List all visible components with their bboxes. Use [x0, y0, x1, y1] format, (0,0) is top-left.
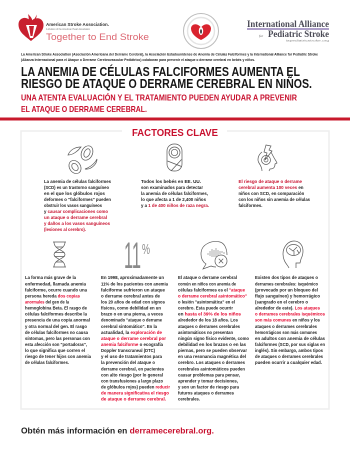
- title: [21, 64, 312, 91]
- text: silent stroke: común en niños con anemia de: [178, 281, 237, 286]
- text: silent stroke: cerebrales asintomáticos pueden: [178, 366, 245, 371]
- icon: head with lightning: [258, 145, 277, 171]
- text: sickle cell disease and trait: La forma más grave de la: [25, 275, 77, 280]
- text: silent stroke: El ataque o derrame cerebral: [178, 275, 237, 280]
- text: stroke types: de ataques o derrames cerebrales: [255, 354, 324, 359]
- text: anemia definition: (lesiones al cerebro).: [44, 227, 86, 232]
- text: silent stroke: asintomáticos no presentan: [178, 330, 233, 335]
- text: newborn screening: lo que afecta a 1 de 2,400 niños: [141, 197, 207, 202]
- logo: International Alliance for Pediatric Stroke: iapediatricstroke.org: [286, 38, 330, 42]
- logo: International Alliance for Pediatric Stroke: for: [259, 34, 264, 38]
- text: stroke types: alrededor de este). Los ataques: [255, 306, 321, 310]
- text: silent stroke: [178, 275, 249, 402]
- stat: 11%: %: [142, 241, 150, 258]
- text: 1998 statistic and treatment: anemia falciforme o ecografía: [101, 342, 164, 347]
- text: 1998 statistic and treatment: con alto riesgo (por lo general: [101, 372, 163, 377]
- text: stroke risk: El riesgo de ataque o derrame: [238, 179, 303, 184]
- text: anemia definition: y daños a los vasos sanguíneos: [44, 221, 111, 226]
- text: silent stroke: cerebro. Los ataques o derrames: [178, 360, 246, 365]
- text: sickle cell disease and trait: falciforme, ocurre cuando una: [25, 287, 88, 292]
- text: silent stroke: o derrame cerebral asintomático": [178, 293, 247, 298]
- text: silent stroke: ataques o derrames cerebrales: [178, 324, 241, 329]
- text: stroke types: Existen dos tipos de ataques o: [255, 275, 318, 280]
- text: stroke types: derrames cerebrales: isquémico: [255, 281, 318, 286]
- text: 1998 statistic and treatment: brazo o en una pierna, a veces: [101, 312, 164, 317]
- text: stroke types: ataques o derrames cerebrales: [255, 324, 318, 329]
- text: 1998 statistic and treatment: derrame cerebral, en pacientes: [101, 366, 165, 371]
- text: sickle cell disease and trait: anormales del gen de la: [25, 300, 70, 304]
- text: stroke risk: cerebral aumenta 100 veces en: [238, 185, 304, 190]
- panel frame: [21, 131, 329, 409]
- icon: blood cells: [66, 144, 97, 176]
- text: anemia definition: y causar complicaciones como: [44, 209, 108, 214]
- text: silent stroke: piernas, pero se pueden observar: [178, 348, 247, 353]
- text: silent stroke: cerebro. Esta puede ocurrir: [178, 306, 233, 310]
- text: silent stroke: causar problemas para pensar,: [178, 372, 240, 377]
- subtitle: EL ATAQUE O DERRAME CEREBRAL.: [21, 104, 147, 114]
- logo: International Alliance for Pediatric Stroke: International Alliance: [247, 19, 329, 29]
- intro note: La American Stroke Association (Asociación Americana del Derrame Cerebral), la Asociación Estadounidense de Anemia de Células Falciformes y la International Alliance for Pediatric Stroke: [21, 52, 318, 56]
- stat: 11%: 11: [124, 235, 141, 276]
- text: 1998 statistic and treatment: actualidad, la exploración de: [101, 330, 163, 335]
- text: stroke types: inglés). Sin embargo, ambos tipos: [255, 348, 324, 353]
- text: sickle cell disease and trait: [25, 275, 92, 365]
- logo: American Stroke Association: American Stroke Association.: [46, 22, 109, 27]
- logo: American Stroke Association: Together to End Stroke: [46, 32, 149, 43]
- text: sickle cell disease and trait: hemoglobina Beta. El rasgo de: [25, 306, 88, 310]
- text: 1998 statistic and treatment: físicos, como debilidad en un: [101, 306, 161, 310]
- intro note: (Alianza Internacional para el Ataque o Derrame Cerebrovascular Pediátrico) colaboran para prevenir el ataque o derrame cerebral en bebés y niños.: [21, 58, 255, 62]
- text: 1998 statistic and treatment: cerebral sintomático". En la: [101, 324, 158, 329]
- text: stroke types: [255, 275, 326, 365]
- text: 1998 statistic and treatment: de glóbulos rojos) pueden reducir: [101, 384, 170, 390]
- text: silent stroke: aprender y tomar decisiones,: [178, 378, 238, 383]
- text: 1998 statistic and treatment: o derrame cerebral antes de: [101, 293, 161, 298]
- subtitle: [21, 92, 297, 114]
- text: sickle cell disease and trait: esta afección son "portadoras",: [25, 342, 87, 347]
- text: 1998 statistic and treatment: ataque o derrame cerebral por: [101, 336, 166, 341]
- text: stroke risk: con los niños sin anemia de células: [238, 197, 311, 202]
- text: 1998 statistic and treatment: En 1998, aproximadamente un: [101, 275, 164, 280]
- text: newborn screening: y a 1 de 400 niños de raza negra.: [141, 203, 209, 208]
- text: anemia definition: obstruir los vasos sanguíneos: [44, 203, 103, 208]
- logo: International Alliance for Pediatric Stroke: [247, 19, 330, 42]
- text: sickle cell disease and trait: y otra normal del gen. El rasgo: [25, 324, 87, 329]
- text: 1998 statistic and treatment: de ataque o derrame cerebral.: [101, 397, 166, 402]
- text: silent stroke: o lesión "asintomática" en el: [178, 300, 235, 304]
- heading: factores clave: FACTORES CLAVE: [132, 127, 218, 139]
- text: stroke risk: [238, 179, 311, 208]
- text: 1998 statistic and treatment: Doppler transcraneal (DTC): [101, 348, 156, 353]
- text: 1998 statistic and treatment: los 20 años de edad con signos: [101, 300, 166, 304]
- icon: heart and torch: [18, 14, 44, 41]
- text: stroke types: flujo sanguíneo) y hemorrágico: [255, 293, 320, 298]
- footer call to action: Obtén más información en derramecerebral.org.: [21, 426, 214, 436]
- text: silent stroke: alrededor de los 18 años. Los: [178, 318, 239, 323]
- text: 1998 statistic and treatment: [101, 275, 170, 402]
- text: silent stroke: y son un factor de riesgo para: [178, 384, 240, 390]
- text: silent stroke: futuros ataques o derrames: [178, 390, 235, 396]
- text: sickle cell disease and trait: células falciformes describe la: [25, 312, 88, 317]
- text: 1998 statistic and treatment: la prevención del ataque o: [101, 360, 155, 365]
- icon: DNA: [53, 242, 66, 267]
- panel: factores clave: [21, 127, 329, 409]
- logo: American Stroke Association: A division of the American Heart Association: [46, 28, 91, 31]
- text: silent stroke: cerebrales.: [178, 397, 200, 402]
- text: newborn screening: son examinados para detectar: [141, 185, 203, 190]
- text: 1998 statistic and treatment: denominado "ataque o derrame: [101, 318, 163, 323]
- text: silent stroke: células falciformes es el "ataque: [178, 287, 246, 292]
- text: stroke types: pueden ocurrir a cualquier edad.: [255, 360, 322, 365]
- text: silent stroke: ningún signo físico evidente, como: [178, 336, 249, 341]
- text: anemia definition: en el que los glóbulos rojos: [44, 191, 106, 196]
- text: sickle cell disease and trait: síntomas, pero las personas con: [25, 336, 90, 341]
- icon: speech bubble with wave and x: [201, 242, 227, 269]
- text: anemia definition: [44, 179, 112, 232]
- text: sickle cell disease and trait: persona hereda dos copias: [25, 293, 81, 298]
- text: 1998 statistic and treatment: 11% de los pacientes con anemia: [101, 281, 169, 286]
- text: stroke types: son más comunes en niños y los: [255, 318, 321, 323]
- icon: head with brain: [283, 241, 303, 268]
- text: anemia definition: deformes o "falciformes" pueden: [44, 197, 111, 202]
- stat: 11%: [124, 235, 150, 276]
- text: 1998 statistic and treatment: falciforme sufrieron un ataque: [101, 287, 166, 292]
- text: stroke types: (provocado por un bloqueo del: [255, 287, 318, 292]
- logo: American Stroke Association: [18, 14, 149, 43]
- text: sickle cell disease and trait: riesgo de tener hijos con anemia: [25, 354, 92, 359]
- text: stroke types: o derrames cerebrales isquémicos: [255, 312, 326, 317]
- text: 1998 statistic and treatment: de manera significativa el riesgo: [101, 390, 169, 396]
- text: newborn screening: la anemia de células falciformes,: [141, 191, 208, 196]
- text: silent stroke: en hasta el 39% de los niños: [178, 312, 242, 317]
- red divider: [0, 118, 350, 120]
- text: newborn screening: Todos los bebés en EE. UU.: [141, 179, 201, 184]
- text: anemia definition: un ataque o derrame cerebral: [44, 215, 107, 220]
- text: stroke types: en adultos con anemia de células: [255, 336, 326, 341]
- intro note: [21, 52, 318, 62]
- text: stroke types: hemorrágicos son más comunes: [255, 330, 318, 335]
- logo: round seal: [184, 14, 218, 48]
- text: anemia definition: La anemia de células falciformes: [44, 179, 112, 184]
- text: silent stroke: debilidad en los brazos o en las: [178, 342, 247, 347]
- icon: swaddled baby: [167, 144, 182, 171]
- text: stroke types: falciformes (SCD, por sus siglas en: [255, 342, 325, 347]
- text: 1998 statistic and treatment: y el uso de tratamientos para: [101, 354, 163, 359]
- text: sickle cell disease and trait: enfermedad, llamada anemia: [25, 281, 87, 286]
- text: stroke types: (sangrado en el cerebro o: [255, 300, 308, 304]
- text: stroke risk: niños con SCD, en comparación: [238, 191, 305, 196]
- text: sickle cell disease and trait: de células falciformes no causa: [25, 330, 89, 335]
- text: sickle cell disease and trait: lo que significa que corren el: [25, 348, 85, 353]
- logo: International Alliance for Pediatric Stroke: Pediatric Stroke: [268, 29, 329, 39]
- text: sickle cell disease and trait: presencia de una copia anormal: [25, 318, 90, 323]
- text: newborn screening: [141, 179, 209, 208]
- subtitle: UNA ATENTA EVALUACIÓN Y EL TRATAMIENTO PUEDEN AYUDAR A PREVENIR: [21, 92, 297, 102]
- text: 1998 statistic and treatment: con transfusiones a largo plazo: [101, 378, 163, 383]
- text: silent stroke: en una resonancia magnética del: [178, 354, 246, 359]
- text: sickle cell disease and trait: de células falciformes.: [25, 360, 69, 365]
- text: anemia definition: (SCD) es un trastorno sanguíneo: [44, 185, 109, 190]
- text: stroke risk: falciformes.: [238, 203, 262, 208]
